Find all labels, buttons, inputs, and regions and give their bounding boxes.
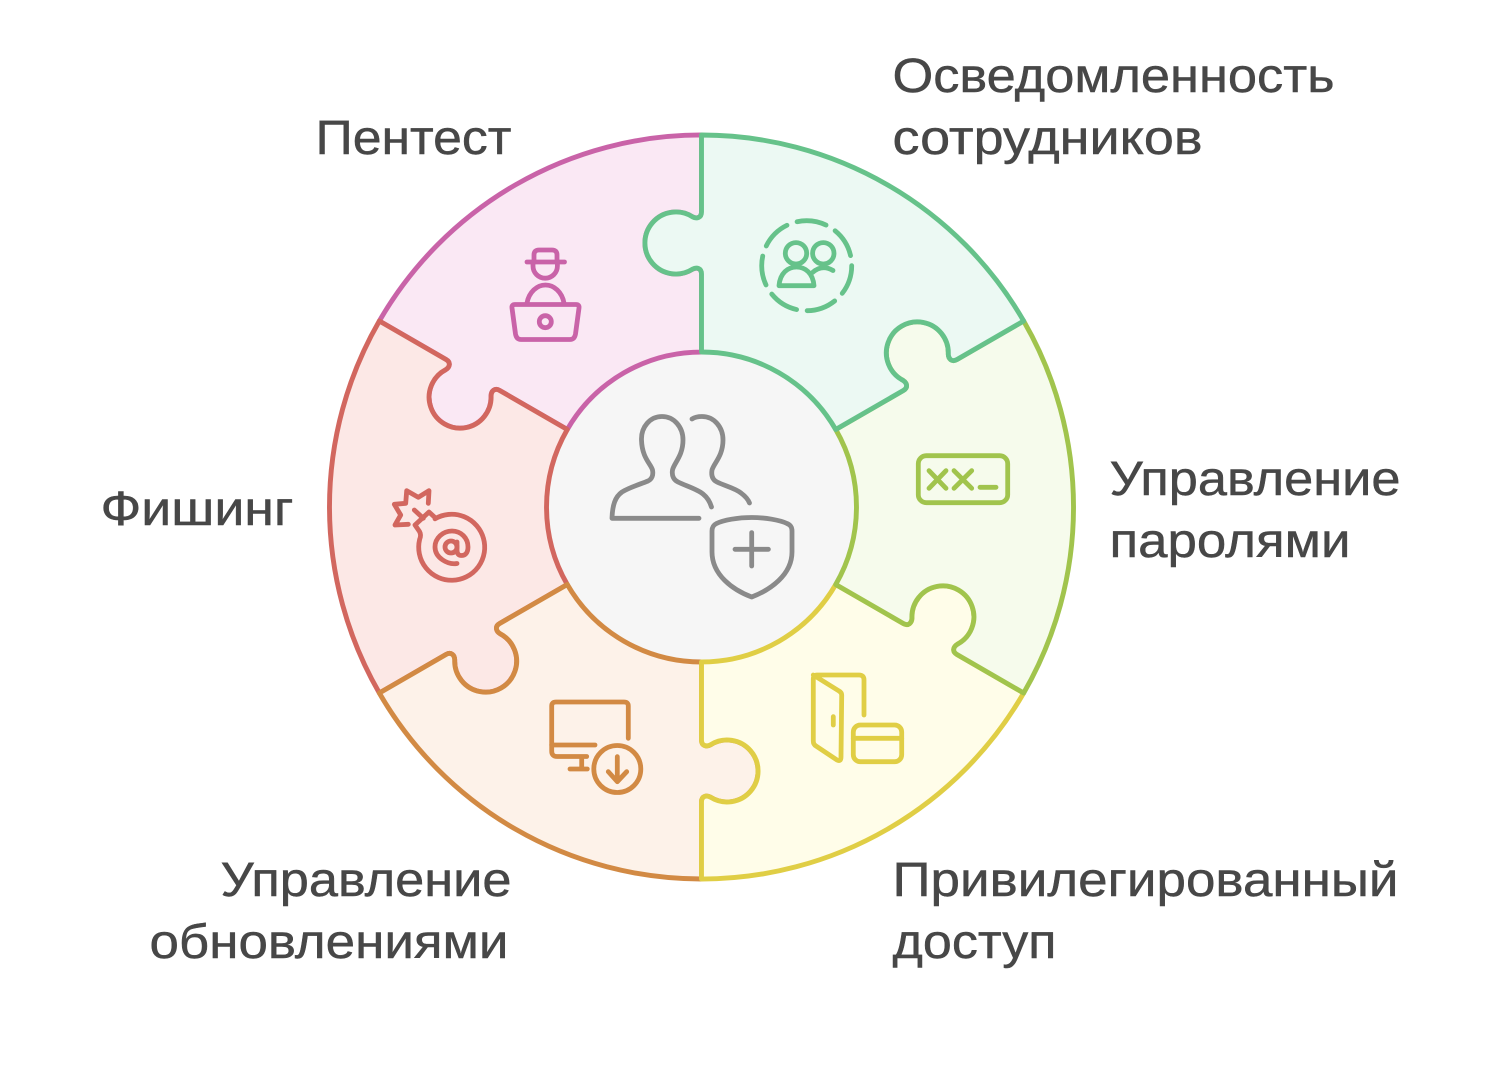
panel: pink piece (Пентест) [351, 42, 795, 517]
label: Фишинг: Фишинг [100, 483, 294, 536]
label: Управление паролями: паролями [1110, 515, 1350, 568]
panel: red piece (Фишинг) [218, 267, 663, 742]
icon: password field [918, 456, 1008, 503]
center hub background [546, 352, 856, 662]
label: Управление паролями: Управление [1110, 453, 1400, 506]
icon: monitor with download [552, 702, 641, 792]
label: Пентест: Пентест [316, 112, 512, 165]
icon: email bomb [394, 491, 485, 580]
label: Управление обновлениями: обновлениями [150, 916, 508, 969]
panel: green piece (Осведомленность сотрудников) [645, 135, 1024, 430]
label: Привилегированный доступ: доступ [892, 916, 1056, 969]
label: Осведомленность сотрудников: Осведомленность [892, 50, 1334, 103]
icon: door and access card [813, 675, 902, 762]
label: Осведомленность сотрудников: сотрудников [892, 112, 1202, 165]
icon: people with shield in center [612, 416, 792, 597]
label: Управление обновлениями: Управление [220, 854, 512, 907]
panel: lime piece (Управление паролями) [740, 272, 1185, 747]
label: Привилегированный доступ [892, 854, 1398, 969]
icon: team in dashed circle [762, 221, 852, 311]
label: Привилегированный доступ: Привилегированный [892, 854, 1398, 907]
label: Осведомленность сотрудников [892, 50, 1334, 165]
label: Управление паролями [1110, 453, 1400, 568]
icon: hacker with laptop [512, 250, 579, 340]
panel: orange piece (Управление обновлениями) [379, 584, 758, 879]
panel: yellow piece (Привилегированный доступ) [608, 497, 1052, 972]
label: Управление обновлениями [150, 854, 512, 969]
